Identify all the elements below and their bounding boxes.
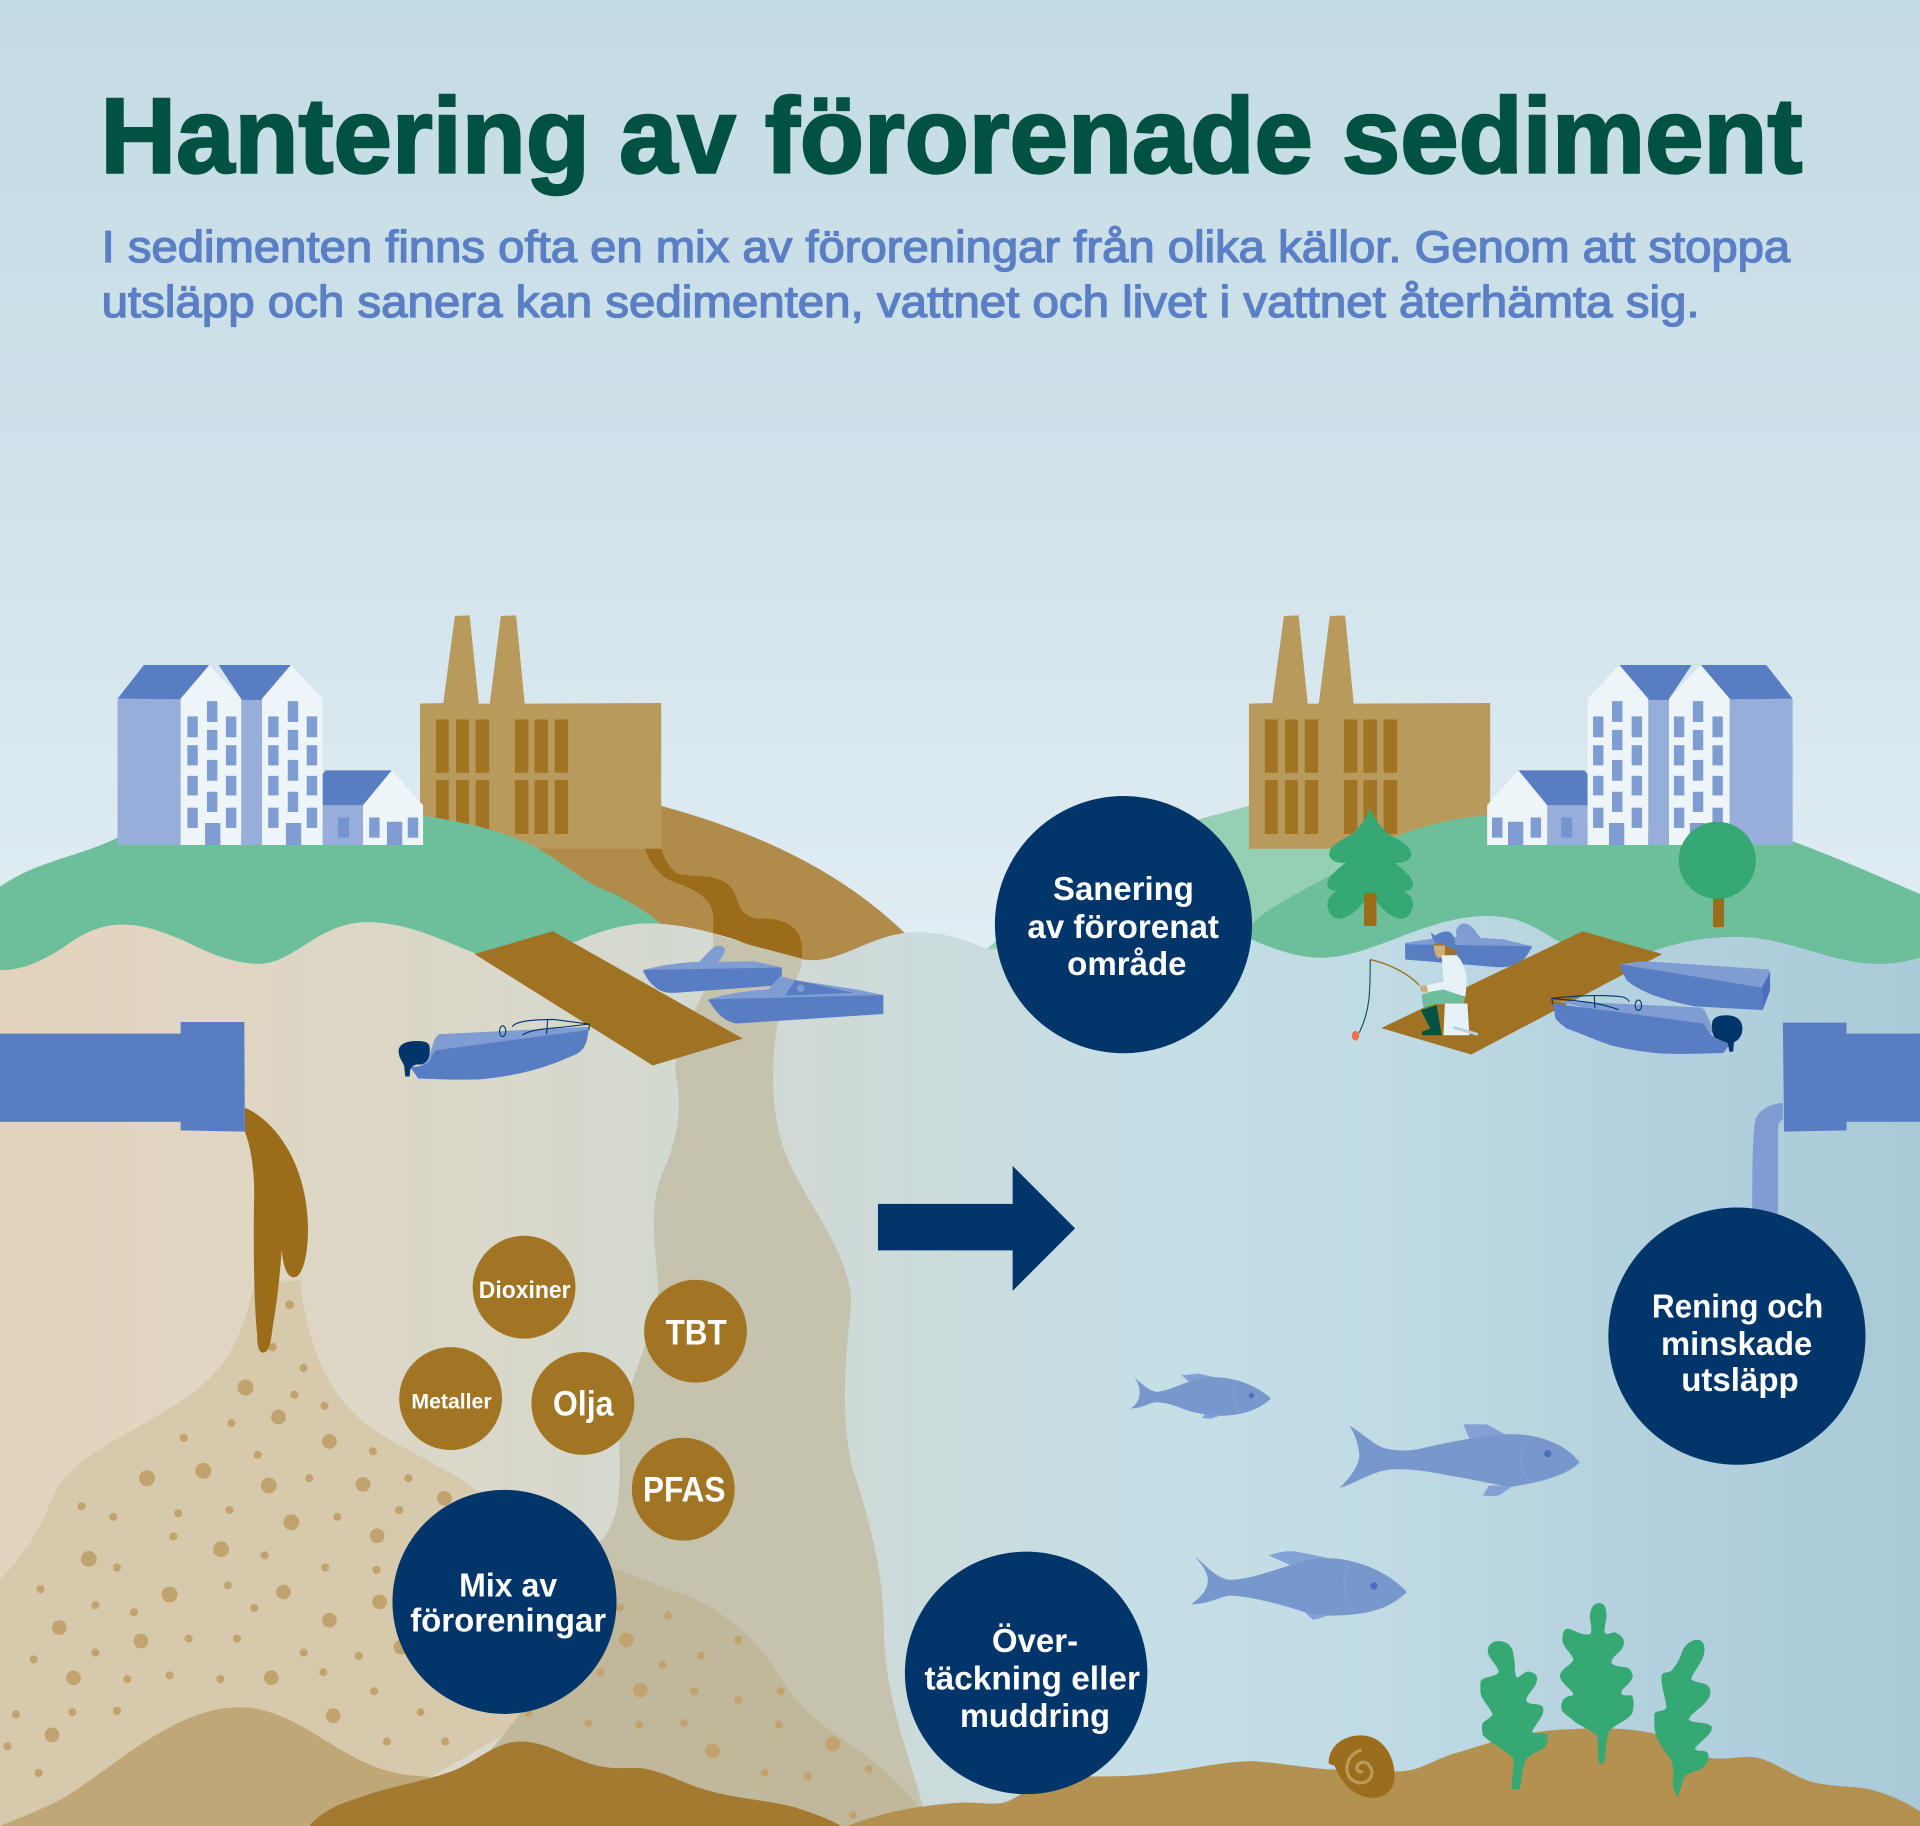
- sediment mound: right: [343, 1555, 927, 1826]
- green hill: left: [0, 816, 661, 992]
- callout: Övertäckning: täckning eller: [924, 1660, 1140, 1697]
- boat: left rear: [643, 946, 782, 993]
- fish: medium: [1191, 1551, 1407, 1620]
- callout: Rening: utsläpp: [1681, 1362, 1799, 1399]
- contaminant: Dioxiner: [473, 1236, 576, 1339]
- callout: Mix av föroreningar: föroreningar: [410, 1602, 606, 1639]
- buildings: left: [118, 665, 423, 845]
- contaminant: Metaller: [399, 1347, 502, 1450]
- callout: Sanering: område: [1067, 946, 1187, 983]
- boat: right large: [1620, 961, 1770, 1010]
- brown seabed hump: [309, 1741, 841, 1826]
- callout: Övertäckning: [905, 1552, 1147, 1794]
- callout: Rening: Rening och: [1652, 1289, 1823, 1326]
- callout: Rening: [1608, 1208, 1866, 1465]
- polluted river: [645, 849, 802, 980]
- fish: small: [1130, 1373, 1271, 1419]
- sediment mound: left: [0, 1280, 539, 1826]
- water: [0, 916, 1920, 1826]
- seashell: [1329, 1735, 1395, 1798]
- pipe: left: [0, 1022, 245, 1132]
- seaweed: [1480, 1603, 1712, 1797]
- fish: large: [1340, 1424, 1580, 1496]
- contaminant: Dioxiner: Dioxiner: [479, 1277, 571, 1304]
- callout: Övertäckning: muddring: [960, 1698, 1110, 1735]
- callout: Övertäckning: Över-: [992, 1623, 1078, 1660]
- polluted plume in water: [576, 933, 927, 1826]
- contaminant: Metaller: Metaller: [411, 1390, 492, 1413]
- round tree: [1679, 822, 1756, 927]
- title: Hantering av förorenade sediment: [100, 77, 1802, 196]
- factory: right: [1249, 615, 1490, 849]
- boat: right rear: [1405, 923, 1532, 967]
- boat: right motorboat: [1552, 995, 1742, 1054]
- contaminant: PFAS: PFAS: [643, 1469, 726, 1509]
- contaminant: Olja: Olja: [553, 1384, 614, 1424]
- factory: left: [420, 615, 661, 849]
- sludge from pipe: [245, 1108, 308, 1353]
- subtitle: [102, 223, 1791, 327]
- callout: Mix av föroreningar: [392, 1490, 617, 1714]
- callout: Sanering: av förorenat: [1027, 909, 1219, 946]
- pipe: right: [1783, 1023, 1920, 1132]
- contaminant: Olja: [531, 1352, 634, 1455]
- contaminant: TBT: [644, 1280, 747, 1383]
- boat: left front: [708, 976, 883, 1023]
- sediment particles: [3, 1300, 873, 1819]
- contaminant: TBT: TBT: [666, 1313, 727, 1353]
- green hill: right: [1251, 816, 1920, 992]
- brown polluted land: [539, 806, 912, 980]
- subtitle: utsläpp och sanera kan sedimenten, vattnet och livet i vattnet återhämta sig.: [102, 278, 1700, 327]
- callout: Sanering: [995, 796, 1252, 1053]
- buildings: right: [1487, 665, 1793, 845]
- dock: left: [474, 931, 743, 1065]
- dock: right: [1381, 931, 1662, 1054]
- boat: left motorboat: [399, 1019, 589, 1080]
- tan seabed hump: [0, 1707, 431, 1826]
- fisher: [1352, 931, 1477, 1041]
- callout: Mix av föroreningar: Mix av: [459, 1567, 558, 1604]
- clean outflow: [1752, 1103, 1783, 1225]
- callout: Sanering: Sanering: [1053, 871, 1194, 908]
- clean seabed: [847, 1728, 1920, 1826]
- spruce tree: [1327, 808, 1413, 926]
- contaminant: PFAS: [632, 1438, 735, 1541]
- arrow: [878, 1166, 1075, 1291]
- subtitle: I sedimenten finns ofta en mix av föroreningar från olika källor. Genom att stoppa: [102, 223, 1791, 272]
- callout: Rening: minskade: [1661, 1326, 1812, 1363]
- light green hill: right: [987, 806, 1518, 992]
